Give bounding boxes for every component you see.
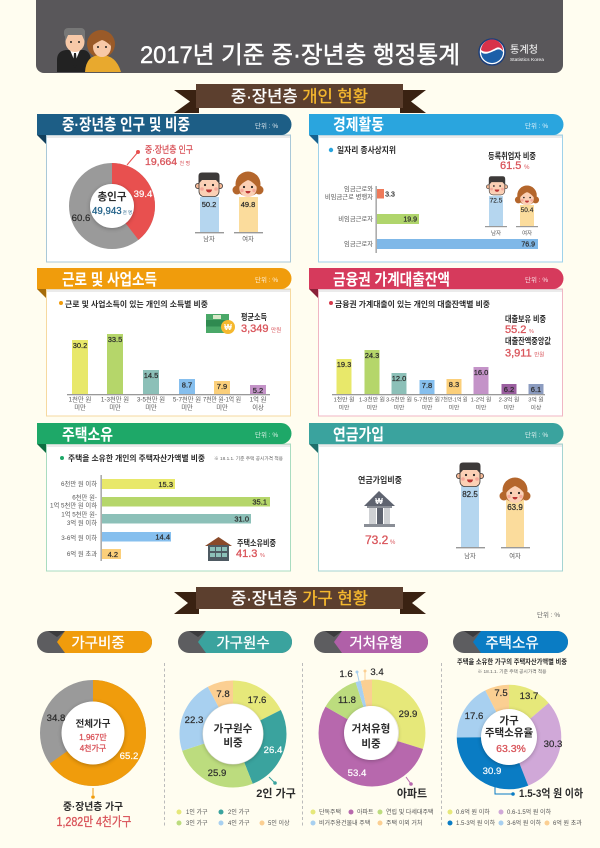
stat: home ownership share: 주택소유비중 (237, 538, 276, 548)
heading: housing asset distribution: 주택을 소유한 개인의 주택자산가액별 비중 (68, 453, 206, 463)
pill: household size: 가구원수 (216, 635, 270, 652)
horizontal bar chart: employment status: 임금근로와 (344, 185, 373, 193)
horizontal bar chart: housing asset value: 3-6억 원 이하 (61, 533, 97, 542)
panel: economic activity: 단위 : % (525, 121, 548, 130)
bar: pension female (500, 478, 530, 560)
bar chart: loan distribution: 3-5천만 원 (386, 396, 412, 404)
bar chart: loan distribution: 7.8 (422, 381, 432, 390)
callout: middle-aged households (56, 788, 132, 829)
stat: registered employment rate: 등록취업자 비중 (488, 151, 536, 161)
legend: dwelling type: 주택 이외 거처 (386, 819, 422, 827)
panel: population and share: 중·장년층 인구 및 비중 (62, 116, 190, 134)
horizontal bar chart: employment status: 임금근로자 (344, 239, 373, 248)
callout: two-person households (256, 777, 296, 800)
horizontal bar chart: housing asset value: 6억 원 초과 (67, 549, 97, 558)
panel: economic activity (309, 114, 564, 262)
illustration: middle-aged man and woman (57, 28, 121, 72)
legend: housing asset value (448, 808, 582, 827)
donut chart: household size: 비중 (223, 736, 243, 749)
panel: household loans: 금융권 가계대출잔액 (333, 271, 450, 289)
bar chart: loan distribution: 1-3천만 원 (359, 396, 385, 404)
bar: registered employment female (515, 185, 539, 237)
donut chart: household home ownership: 30.9 (483, 766, 501, 777)
bar chart: income distribution: 1억 원 (250, 394, 267, 404)
header banner (36, 0, 563, 73)
bar chart: loan distribution: 미만 (449, 404, 460, 412)
heading: income distribution: 근로 및 사업소득이 있는 개인의 소득별 비중 (65, 299, 209, 309)
ribbon heading: personal status: 중·장년층 개인 현황 (231, 87, 368, 106)
bar chart: loan distribution: 미만 (422, 404, 433, 412)
callout: two-person households: 2인 가구 (256, 786, 296, 800)
horizontal bar chart: employment status: 76.9 (521, 242, 535, 248)
panel: earned and business income: 단위 : % (255, 275, 278, 284)
bar chart: loan distribution: 미만 (394, 404, 405, 412)
bar: female share (232, 172, 264, 243)
bar chart: income distribution: 30.2 (73, 341, 87, 350)
legend: household size (176, 808, 290, 827)
panel: household loans: 단위 : % (525, 275, 548, 284)
legend: housing asset value: 0.6-1.5억 원 이하 (507, 808, 552, 816)
bar: registered employment female: 여자 (522, 229, 532, 237)
donut chart: dwelling type: 29.9 (399, 709, 417, 720)
bar: pension male (456, 462, 485, 560)
bar chart: loan distribution: 16.0 (474, 368, 488, 377)
donut chart: total population: 60.6 (72, 213, 90, 224)
panel: earned and business income (37, 268, 292, 416)
bar chart: income distribution: 미만 (181, 402, 193, 412)
donut chart: household home ownership (465, 688, 562, 777)
donut chart: household size: 22.3 (185, 715, 203, 726)
donut chart: household home ownership: 13.7 (520, 691, 538, 702)
horizontal bar chart: employment status (325, 185, 538, 253)
title: 2017년 기준 중·장년층 행정통계 (140, 42, 460, 69)
donut chart: total population: 총인구 (98, 191, 127, 203)
bar: pension male: 남자 (464, 551, 476, 560)
bar chart: loan distribution: 미만 (367, 404, 378, 412)
logo: Statistics Korea (479, 39, 545, 65)
bar: female share: 49.8 (241, 200, 255, 209)
horizontal bar chart: housing asset value: 6천만 원- (72, 492, 97, 502)
bar chart: loan distribution: 8.3 (449, 380, 459, 389)
bar chart: loan distribution: 6.1 (531, 385, 541, 394)
horizontal bar chart: employment status: 비임금근로자 (338, 214, 373, 223)
heading: loan distribution: 금융권 가계대출이 있는 개인의 대출잔액별 비중 (335, 299, 491, 309)
donut chart: household home ownership: 7.5 (494, 688, 508, 699)
stat: registered employment rate (488, 151, 536, 172)
stat: average income (241, 312, 281, 335)
callout: middle-aged households: 1,282만 4천가구 (56, 814, 132, 829)
bar chart: loan distribution: 미만 (476, 404, 487, 412)
panel: home ownership: 주택소유 (62, 426, 113, 444)
panel: population and share: 단위 : % (255, 121, 278, 130)
bar chart: income distribution: 14.5 (144, 371, 158, 380)
donut chart: household size: 25.9 (208, 768, 226, 779)
callout: 150-300 million won: 1.5-3억 원 이하 (519, 786, 583, 800)
heading: household home ownership: 주택을 소유한 가구의 주택자산가액별 비중 (457, 657, 567, 666)
bar chart: income distribution: 미만 (109, 402, 121, 412)
donut chart: dwelling type: 거처유형 (352, 722, 390, 735)
icon: money: ₩ (224, 323, 232, 332)
bar: registered employment male (485, 176, 508, 237)
stat: home ownership share: 41.3 % (236, 548, 265, 560)
callouts: small dwelling segments: 3.4 (370, 667, 384, 678)
panel: household loans (309, 268, 564, 416)
legend: household size: 5인 이상 (268, 819, 290, 827)
heading: household home ownership (457, 657, 567, 675)
horizontal bar chart: employment status: 19.9 (403, 216, 417, 224)
heading: housing asset distribution (60, 453, 284, 463)
stat: loan holding share and median: 55.2 % (505, 324, 534, 336)
bar: registered employment male: 남자 (491, 229, 501, 237)
icon: money (206, 314, 235, 334)
horizontal bar chart: housing asset value: 31.0 (234, 514, 249, 524)
callout: 150-300 million won (495, 785, 583, 800)
panel: pension enrollment: 단위 : % (525, 430, 548, 439)
donut chart: household home ownership: 30.3 (544, 739, 562, 750)
bar chart: income distribution: 7.9 (217, 382, 227, 391)
donut chart: dwelling type: 53.4 (348, 768, 367, 779)
donut chart: total population (72, 174, 153, 238)
bar chart: income distribution: 미만 (145, 402, 157, 412)
pill: household size (178, 631, 292, 653)
bar chart: loan distribution: 24.3 (365, 351, 379, 360)
legend: dwelling type: 비거주용건물내 주택 (319, 819, 370, 827)
bar chart: income distribution: 8.7 (182, 380, 192, 390)
pill: dwelling type: 거처유형 (349, 635, 403, 652)
heading: housing asset distribution: ※ 18.1.1. 기준 주택 공시가격 적용 (214, 455, 284, 462)
horizontal bar chart: housing asset value: 35.1 (252, 498, 267, 506)
bar: pension male: 82.5 (462, 490, 478, 499)
callout: middle-aged population: 중·장년층 인구 (145, 145, 193, 156)
callout: middle-aged households: 중·장년층 가구 (63, 800, 123, 813)
donut chart: household size: 7.8 (216, 689, 230, 700)
legend: household size: 2인 가구 (228, 808, 250, 816)
horizontal bar chart: housing asset value: 6천만 원 이하 (61, 479, 97, 488)
donut chart: household home ownership: 63.3% (496, 743, 526, 755)
bar chart: income distribution: 7천만 원-1억 원 (203, 394, 241, 404)
stat: loan holding share and median: 대출보유 비중 (505, 314, 546, 324)
pill: home ownership: 주택소유 (485, 635, 539, 652)
donut chart: dwelling type: 비중 (361, 737, 381, 750)
panel: economic activity: 경제활동 (333, 116, 384, 134)
pill: household share: 가구비중 (71, 635, 125, 652)
bar chart: loan distribution: 1-2억 원 (471, 396, 491, 404)
bar chart: loan distribution: 이상 (531, 404, 542, 412)
legend: housing asset value: 3-6억 원 이하 (507, 819, 542, 827)
donut chart: household size: 17.6 (248, 695, 266, 706)
donut chart: total population: 39.4 (134, 189, 153, 200)
panel: pension enrollment: 연금가입 (333, 426, 384, 444)
stat: loan holding share and median: 3,911 만원 (505, 348, 544, 360)
stat: average income: 3,349 만원 (241, 323, 281, 335)
donut chart: household size: 26.4 (264, 745, 283, 756)
horizontal bar chart: employment status: 3.3 (385, 192, 395, 198)
bar chart: loan distribution: 5-7천만 원 (414, 396, 440, 404)
stat: pension share with bank icon: 연금가입비중 (358, 475, 402, 485)
bar chart: income distribution: 1천만 원 (69, 394, 92, 404)
bar chart: income distribution (67, 334, 270, 412)
horizontal bar chart: housing asset value: 1억 5천만 원- (61, 510, 97, 518)
bar chart: loan distribution: 미만 (339, 404, 350, 412)
logo: Statistics Korea: 통계청 (510, 44, 538, 56)
horizontal bar chart: housing asset value: 15.3 (158, 480, 173, 489)
donut chart: household share: 4천가구 (80, 743, 106, 753)
horizontal bar chart: housing asset value: 4.2 (108, 550, 118, 559)
stat: loan holding share and median (505, 314, 551, 360)
bar chart: loan distribution: 7천만-1억 원 (440, 396, 468, 404)
bar chart: loan distribution: 미만 (504, 404, 515, 412)
logo: Statistics Korea: Statistics Korea (510, 57, 545, 62)
bar: male share (195, 172, 224, 243)
bar chart: loan distribution: 19.3 (337, 360, 351, 369)
unit note: 단위 : % (537, 610, 560, 619)
legend: housing asset value: 1.5-3억 원 이하 (456, 819, 496, 827)
bar chart: income distribution: 5.2 (253, 386, 263, 395)
bar: male share: 남자 (203, 234, 215, 243)
bar chart: loan distribution (332, 350, 545, 412)
panel: earned and business income: 근로 및 사업소득 (62, 271, 157, 289)
panel: population and share (37, 114, 292, 262)
bar chart: income distribution: 이상 (252, 402, 264, 412)
bar chart: loan distribution: 1천만 원 (334, 396, 354, 404)
bar chart: income distribution: 5-7천만 원 (173, 394, 201, 404)
stat: pension share with bank icon: 73.2 % (365, 533, 396, 547)
bar: registered employment male: 72.5 (490, 198, 503, 204)
horizontal bar chart: housing asset value (50, 475, 270, 561)
ribbon heading: personal status (174, 84, 426, 113)
bar: pension female: 63.9 (507, 503, 523, 512)
donut chart: household size (185, 689, 283, 779)
bar chart: income distribution: 미만 (216, 402, 228, 412)
callouts: small dwelling segments: 1.6 (339, 669, 353, 680)
donut chart: household size: 가구원수 (214, 722, 253, 735)
callout: middle-aged population (127, 145, 193, 168)
callout: middle-aged population: 19,664 천 명 (145, 156, 190, 168)
legend: household size: 3인 가구 (186, 819, 208, 827)
horizontal bar chart: housing asset value: 3억 원 이하 (67, 518, 97, 527)
bar: pension female: 여자 (509, 551, 521, 560)
donut chart: dwelling type: 11.8 (338, 695, 356, 706)
legend: household size: 1인 가구 (186, 808, 208, 816)
bar: registered employment female: 50.4 (521, 207, 534, 214)
heading: employment status: 일자리 종사상지위 (337, 145, 396, 155)
donut chart: household home ownership: 주택소유율 (485, 727, 533, 739)
ribbon heading: household status: 중·장년층 가구 현황 (231, 589, 368, 608)
legend: dwelling type: 연립 및 다세대주택 (386, 808, 434, 816)
horizontal bar chart: housing asset value: 1억 5천만 원 이하 (50, 500, 97, 510)
legend: dwelling type (310, 808, 434, 827)
bar chart: income distribution: 3-5천만 원 (137, 394, 165, 404)
panel: home ownership (37, 423, 292, 571)
bar chart: loan distribution: 3억 원 (528, 396, 544, 404)
callouts: small dwelling segments (339, 667, 384, 681)
pill: home ownership (453, 631, 568, 653)
stat: home ownership share (236, 538, 276, 560)
horizontal bar chart: housing asset value: 14.4 (155, 532, 170, 542)
donut chart: household share: 1,967만 (79, 733, 107, 742)
legend: household size: 4인 가구 (228, 819, 250, 827)
stat: average income: 평균소득 (241, 312, 267, 322)
pill: dwelling type (314, 631, 428, 653)
bar chart: income distribution: 미만 (74, 402, 86, 412)
legend: housing asset value: 0.6억 원 이하 (456, 808, 490, 816)
legend: dwelling type: 아파트 (357, 808, 374, 816)
donut chart: total population: 49,943 천 명 (92, 206, 132, 217)
donut chart: household share: 65.2 (120, 751, 138, 762)
legend: dwelling type: 단독주택 (319, 808, 341, 816)
stat: pension share with bank icon (358, 475, 402, 547)
bar chart: loan distribution: 6.2 (504, 385, 514, 394)
heading: household home ownership: ※ 18.1.1. 기준 주택 공시가격 적용 (478, 668, 547, 675)
bar: female share: 여자 (242, 234, 254, 243)
legend: housing asset value: 6억 원 초과 (553, 819, 582, 827)
donut chart: household home ownership: 17.6 (465, 711, 483, 722)
panel: pension enrollment (309, 423, 564, 571)
horizontal bar chart: employment status: 비임금근로 병행자 (325, 192, 373, 201)
stat: loan holding share and median: 대출잔액중앙값 (505, 336, 551, 346)
donut chart: household share (47, 691, 138, 775)
stat: registered employment rate: 61.5 % (500, 160, 530, 172)
callout: apartment (397, 777, 427, 800)
donut chart: household share: 전체가구 (76, 718, 111, 730)
bar chart: income distribution: 33.5 (108, 335, 122, 344)
donut chart: dwelling type (332, 693, 417, 779)
ribbon heading: household status (174, 587, 426, 614)
callout: apartment: 아파트 (397, 787, 427, 800)
stat: pension share with bank icon: ₩ (375, 497, 383, 506)
bar chart: loan distribution: 2-3억 원 (499, 396, 519, 404)
donut chart: household home ownership: 가구 (499, 714, 519, 727)
bar chart: income distribution: 1-3천만 원 (101, 394, 129, 404)
bar: male share: 50.2 (202, 200, 216, 209)
pill: household share (37, 631, 152, 653)
bar chart: loan distribution: 12.0 (392, 374, 406, 383)
icon: house (205, 537, 232, 561)
donut chart: household share: 34.8 (47, 713, 65, 724)
panel: home ownership: 단위 : % (255, 430, 278, 439)
